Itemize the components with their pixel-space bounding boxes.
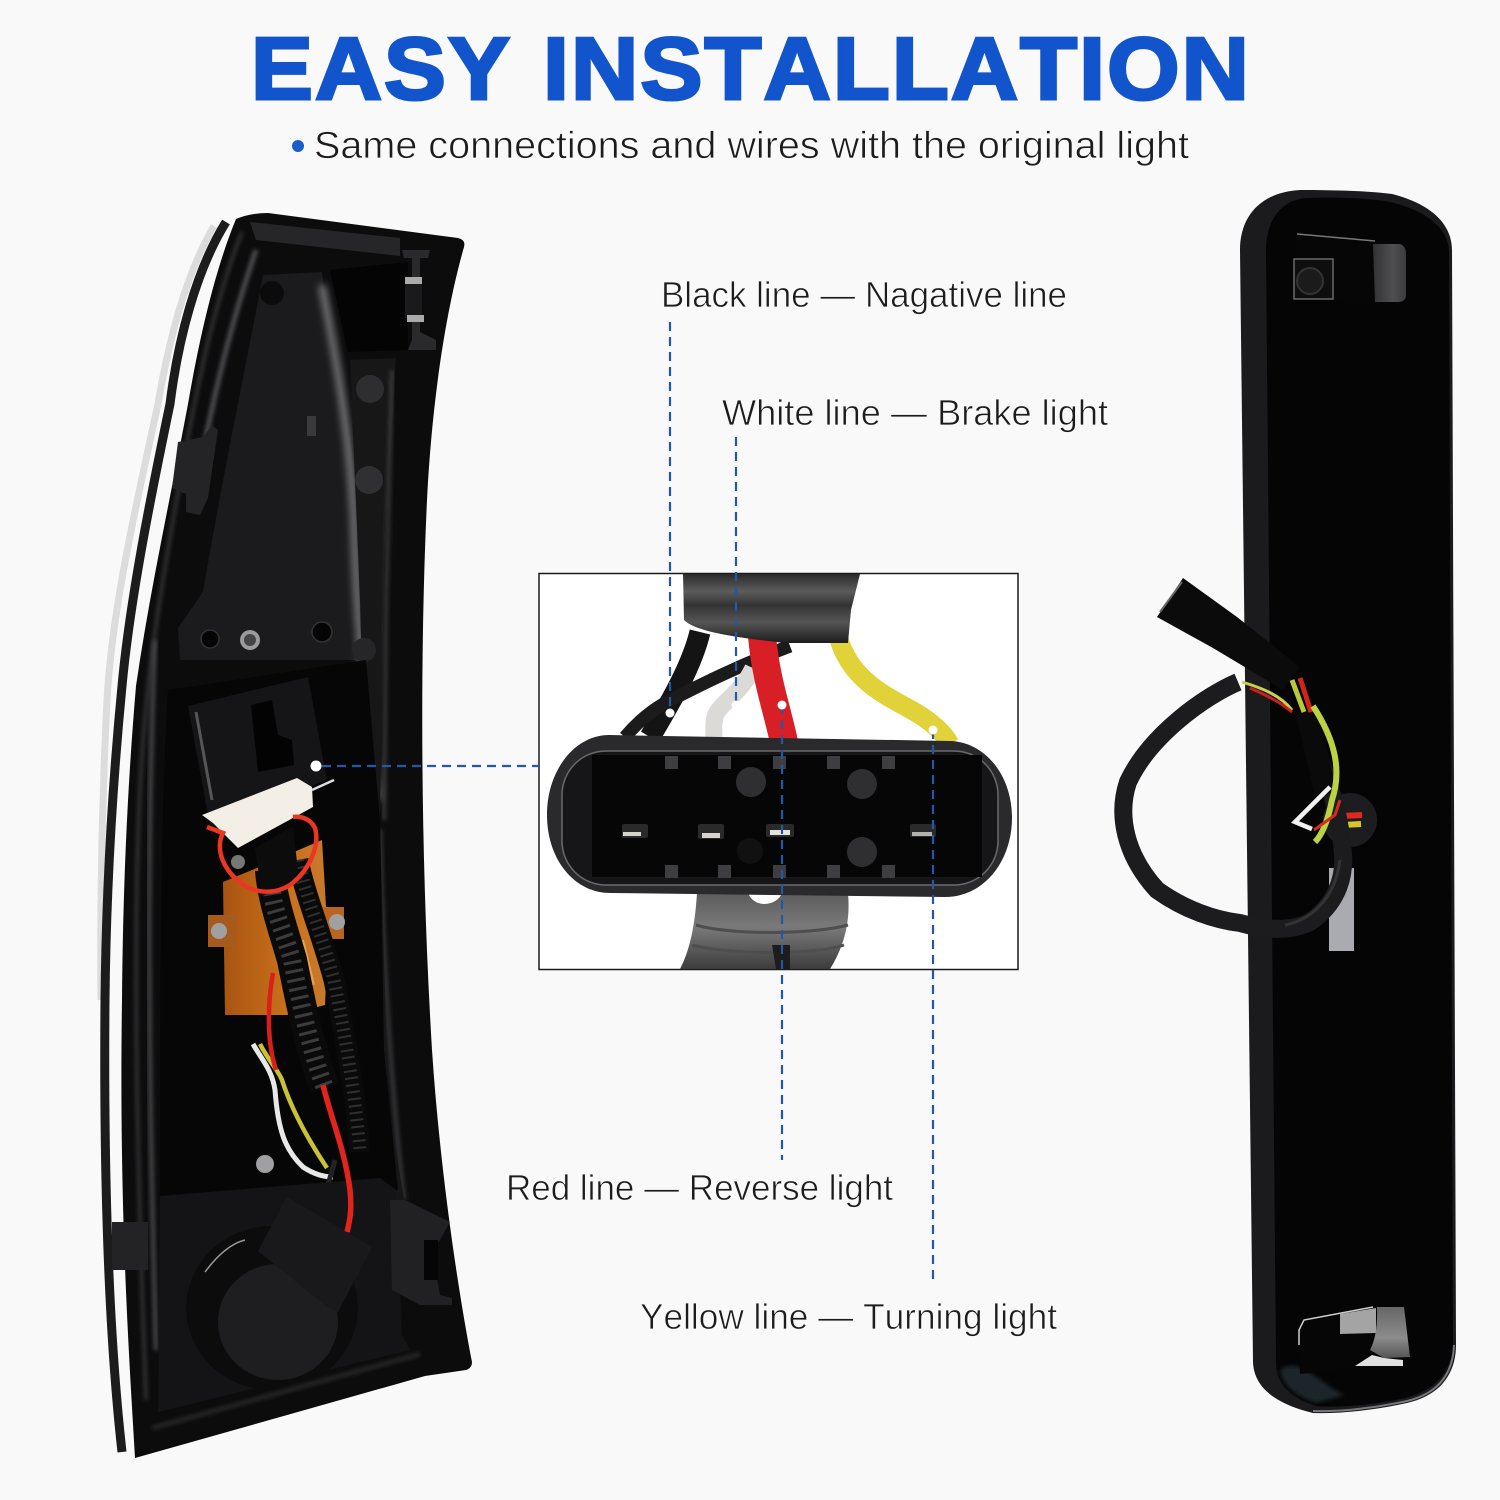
- grommet flap: [258, 1197, 372, 1312]
- multi colored wires: [1242, 682, 1292, 710]
- lower right clip: [390, 1200, 452, 1305]
- upper interior panel: [178, 272, 362, 660]
- inset panel: connector close-up: [539, 574, 1018, 970]
- white wire: [253, 1044, 333, 1177]
- inner cavity rim: [562, 751, 998, 885]
- silver tag: [1329, 868, 1354, 951]
- callout: red line: [781, 705, 783, 1160]
- thin black wire: [316, 1160, 335, 1208]
- title: EASY: [251, 19, 512, 118]
- orange gap detail: [302, 940, 313, 985]
- callout: yellow line: [932, 730, 934, 1284]
- conduit notch: [748, 893, 782, 904]
- label: black line: Black line — Nagative line: [661, 274, 1067, 315]
- metal pins: [622, 824, 936, 839]
- corrugated tube right: [298, 860, 360, 1152]
- middle left clip: [172, 425, 218, 515]
- upper right clip: [402, 250, 436, 350]
- top ribs: [665, 756, 895, 769]
- label: yellow line: Yellow line — Turning light: [640, 1296, 1057, 1337]
- right inner channel: [350, 358, 404, 1200]
- callout: connector link: [322, 765, 539, 767]
- bottom window: [1299, 1306, 1413, 1374]
- white wire: [714, 668, 753, 739]
- top window: [1293, 234, 1407, 304]
- green wire: [1313, 706, 1336, 842]
- lower interior cavity: [160, 660, 398, 1196]
- yellow wire: [260, 1044, 327, 1168]
- inset frame: [539, 574, 1018, 970]
- white plug: [202, 778, 313, 848]
- highlight along panel: [322, 285, 378, 800]
- heat shrink tube: [683, 574, 860, 643]
- label: red line: Red line — Reverse light: [506, 1167, 893, 1208]
- callout dots: [666, 700, 938, 734]
- lower cap panel: [158, 1178, 410, 1412]
- left tail light, back view: [101, 213, 472, 1458]
- label: white line: White line — Brake light: [722, 392, 1108, 433]
- white wire: [1295, 787, 1330, 829]
- callout: white line: [735, 437, 737, 705]
- title: [251, 19, 1251, 118]
- top heat-shrink: [255, 826, 299, 896]
- outer grey lens edge: [101, 226, 214, 1000]
- main body: [121, 213, 472, 1458]
- bottom lip highlight: [152, 1354, 420, 1428]
- corrugated conduit: [680, 893, 849, 969]
- black face: [1266, 198, 1453, 1407]
- grommet hole: [1323, 793, 1377, 847]
- screws: [168, 855, 352, 1319]
- right third brake light, back view: [1123, 190, 1456, 1413]
- long red wire: [323, 1085, 351, 1232]
- corrugated tube left: [270, 870, 325, 1088]
- red loop wire: [207, 817, 316, 892]
- top rim: [250, 222, 400, 256]
- inner cavity: [592, 755, 982, 877]
- small red wire: [269, 973, 276, 1070]
- bottom reflection: [1280, 1366, 1345, 1403]
- sleeve: [1296, 708, 1336, 800]
- dark square recess: [330, 262, 408, 352]
- callout: black line: [669, 322, 671, 712]
- red wire: [762, 636, 784, 742]
- lower left clip: [112, 1222, 148, 1270]
- red and yellow stubs: [1342, 815, 1362, 816]
- subtitle with bullet: Same connections and wires with the original light: [314, 125, 1189, 167]
- connector plug: [1157, 578, 1300, 690]
- callout lines and dots: [322, 322, 933, 1284]
- conduit bands: [692, 925, 848, 952]
- rubber grommet: [186, 1226, 358, 1390]
- orange resistor: [208, 840, 344, 1015]
- cable loop: [1123, 682, 1343, 929]
- yellow wire: [838, 636, 950, 744]
- connector socket: [188, 677, 327, 826]
- connector housing: [547, 735, 1012, 897]
- bottom ribs: [665, 865, 895, 878]
- screw: [240, 630, 260, 650]
- long glossy strips: [136, 232, 242, 1400]
- round marks: [736, 767, 877, 867]
- red bend: [1314, 800, 1340, 830]
- outer black strip: [105, 222, 226, 1452]
- conduit split: [772, 945, 790, 969]
- panel hole marks: [260, 281, 284, 305]
- bump row: [201, 622, 332, 648]
- bottom edge highlight: [1313, 1345, 1454, 1411]
- outer rim: [1240, 190, 1456, 1413]
- black wires: [650, 632, 700, 737]
- callout dot on socket: [310, 760, 322, 772]
- title: INSTALLATION: [543, 19, 1251, 118]
